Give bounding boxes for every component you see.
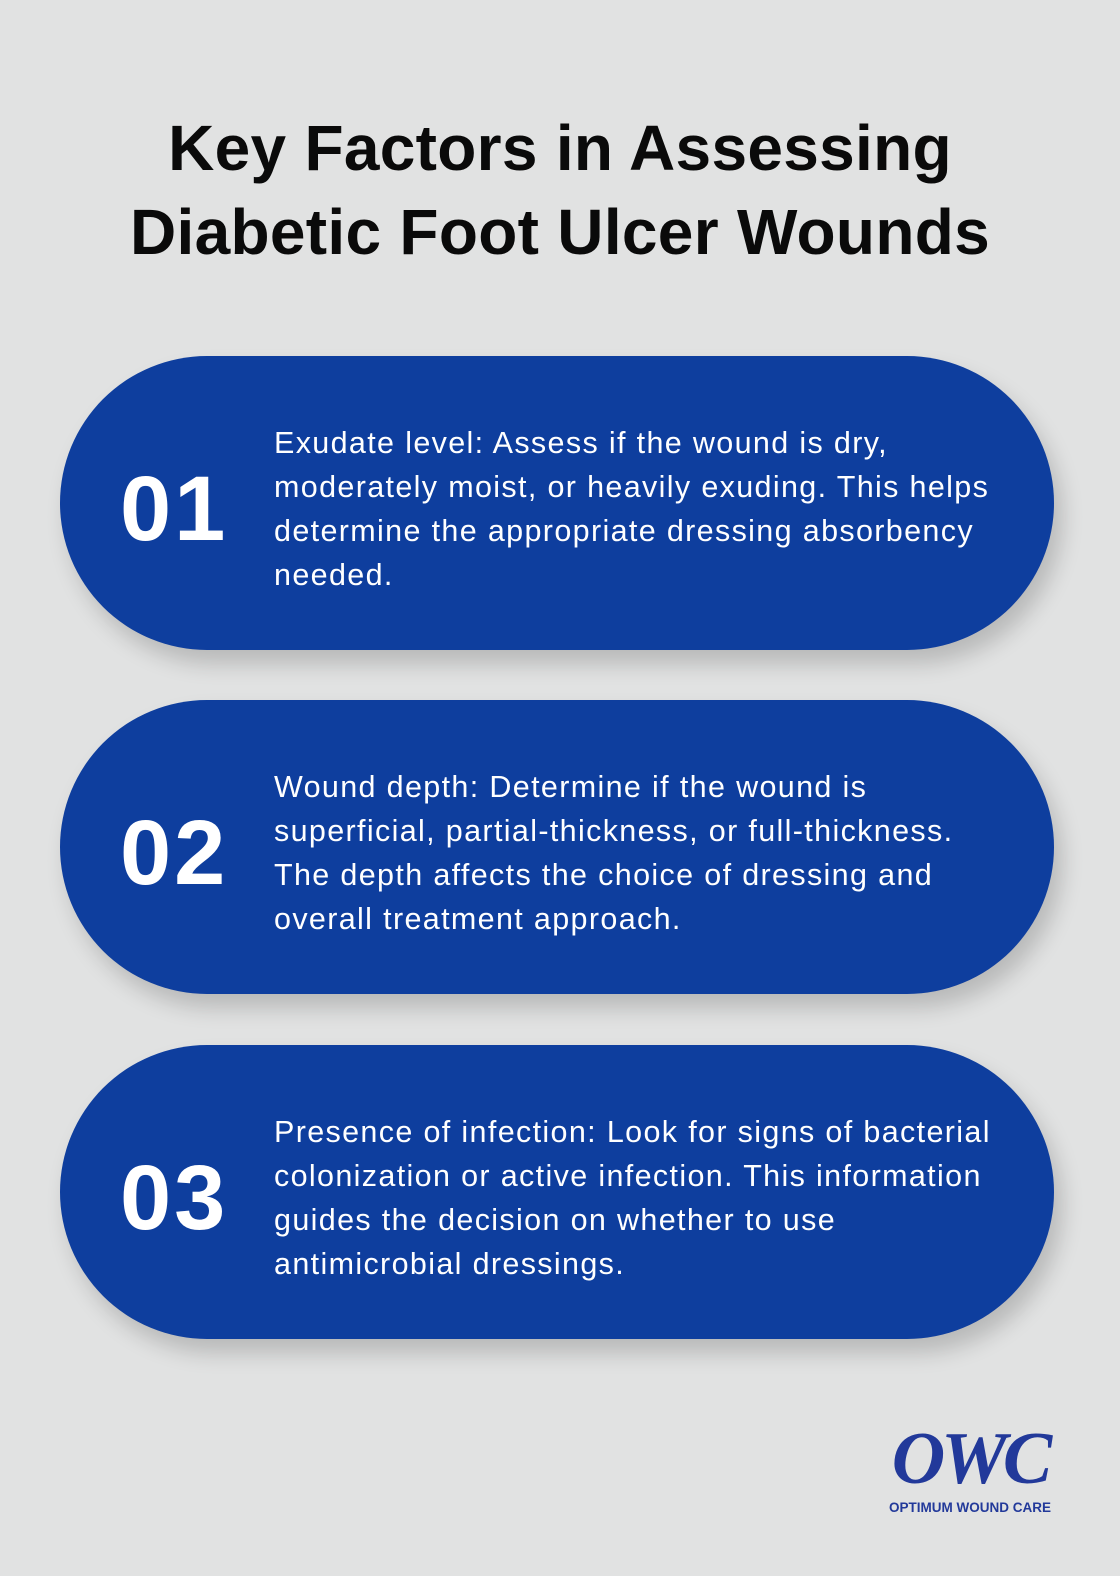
title: Diabetic Foot Ulcer Wounds	[130, 196, 990, 268]
text: exudate: Exudate level: Assess if the wound is dry,	[274, 426, 888, 460]
logo: OWC	[892, 1418, 1048, 1500]
text: infection: colonization or active infection. This information	[274, 1159, 982, 1193]
panel: 01 exudate level	[60, 356, 1054, 650]
text: infection	[274, 1115, 991, 1281]
text: depth: The depth affects the choice of dressing and	[274, 858, 933, 892]
text: exudate	[274, 426, 989, 592]
text: depth: superficial, partial-thickness, or full-thickness.	[274, 814, 953, 848]
number 03: 03	[120, 1147, 228, 1249]
number 02: 02	[120, 802, 228, 904]
text: depth: Wound depth: Determine if the wound is	[274, 770, 867, 804]
text: exudate: needed.	[274, 558, 394, 592]
title	[130, 112, 990, 268]
panel: 02 wound depth	[60, 700, 1054, 994]
title: Key Factors in Assessing	[168, 112, 952, 184]
panel: 03 infection	[60, 1045, 1054, 1339]
text: depth: overall treatment approach.	[274, 902, 682, 936]
text: depth	[274, 770, 953, 936]
logo: OPTIMUM WOUND CARE	[889, 1500, 1051, 1515]
text: infection: guides the decision on whether to use	[274, 1203, 836, 1237]
number 01: 01	[120, 458, 228, 560]
text: infection: Presence of infection: Look for signs of bacterial	[274, 1115, 991, 1149]
text: exudate: determine the appropriate dressing absorbency	[274, 514, 974, 548]
text: infection: antimicrobial dressings.	[274, 1247, 625, 1281]
text: exudate: moderately moist, or heavily exuding. This helps	[274, 470, 989, 504]
